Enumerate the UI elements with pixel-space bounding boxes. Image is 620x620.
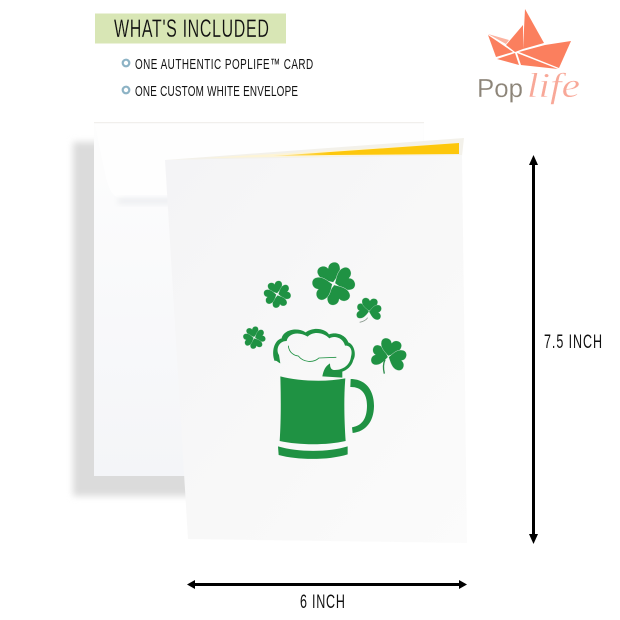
foam inner line: [288, 346, 336, 361]
beer mug and clovers artwork: [241, 258, 408, 459]
clover: three-leaf lower right: [370, 337, 408, 374]
logo: poplife paper boat: Pop: [477, 73, 523, 103]
clover: large top: [308, 258, 360, 310]
clover: small far-left: [241, 325, 267, 351]
flap shadow: [118, 198, 178, 204]
header: what's included: WHAT'S INCLUDED: [114, 16, 269, 43]
envelope with shadow: [73, 122, 424, 496]
dimension arrow: height: [529, 155, 538, 544]
front of card: [165, 155, 467, 543]
logo: poplife paper boat: life: [527, 66, 580, 105]
included items list: ONE AUTHENTIC POPLIFE™ CARD: [135, 56, 313, 73]
mug base: [278, 446, 348, 459]
dimension arrow: width: [187, 580, 467, 589]
dimension label: height: 7.5 INCH: [544, 331, 602, 353]
included items list: ONE CUSTOM WHITE ENVELOPE: [135, 83, 298, 100]
mug body: [280, 376, 346, 444]
inner card with yellow edge: [165, 138, 464, 160]
foam outline: [273, 329, 355, 378]
included items list: [123, 56, 313, 100]
envelope flap: [95, 124, 423, 198]
clover: small left-top: [261, 278, 293, 310]
mug handle: [350, 379, 374, 433]
dimension label: width: 6 INCH: [300, 591, 345, 613]
clover: three-leaf upper right: [356, 297, 382, 322]
logo: poplife paper boat: [477, 9, 580, 105]
